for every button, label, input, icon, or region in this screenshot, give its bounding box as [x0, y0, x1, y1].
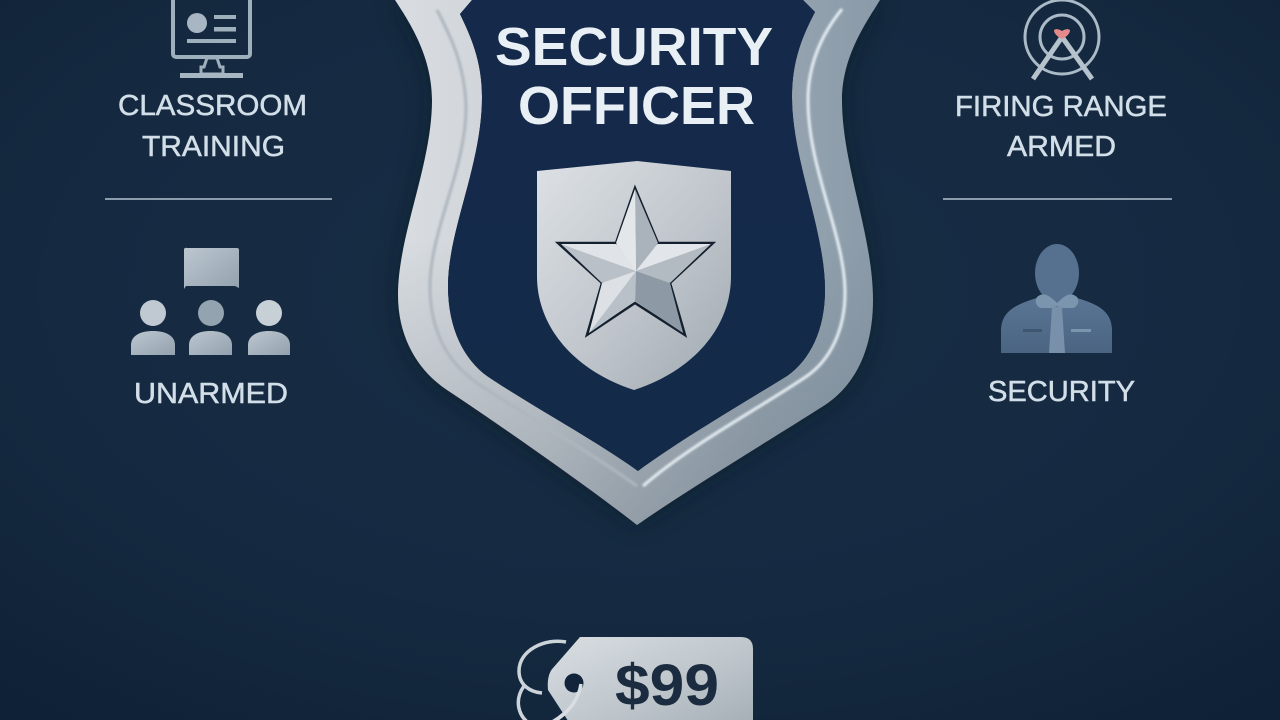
label: classroom training: TRAINING	[142, 131, 285, 163]
label: firing range armed	[955, 91, 1167, 163]
panel: central badge	[395, 0, 880, 525]
label: classroom training	[118, 90, 307, 163]
label: unarmed: UNARMED	[134, 378, 288, 410]
label: firing range armed: FIRING RANGE	[955, 91, 1167, 123]
tag body	[548, 637, 753, 720]
title: SECURITY	[495, 17, 773, 77]
price: $99	[615, 653, 719, 718]
price tag	[518, 637, 753, 720]
rim highlight right	[643, 9, 845, 486]
rim groove left	[430, 10, 637, 486]
shield rim	[395, 0, 880, 525]
label: security: SECURITY	[988, 376, 1135, 408]
icon: group with speech bubble	[131, 248, 290, 355]
inner shield with star	[537, 161, 731, 390]
icon: security guard bust	[1001, 244, 1112, 353]
tag string rings	[518, 641, 580, 720]
panel: right training column	[943, 0, 1172, 408]
badge field	[448, 0, 825, 471]
tag hole	[564, 674, 584, 692]
panel: left training column	[105, 0, 332, 410]
label: classroom training: CLASSROOM	[118, 90, 307, 122]
title: OFFICER	[518, 76, 755, 136]
icon: firing range target	[1025, 0, 1099, 79]
title	[495, 17, 773, 136]
icon: classroom monitor	[173, 0, 250, 78]
label: firing range armed: ARMED	[1007, 131, 1116, 163]
icon: star	[558, 188, 713, 335]
